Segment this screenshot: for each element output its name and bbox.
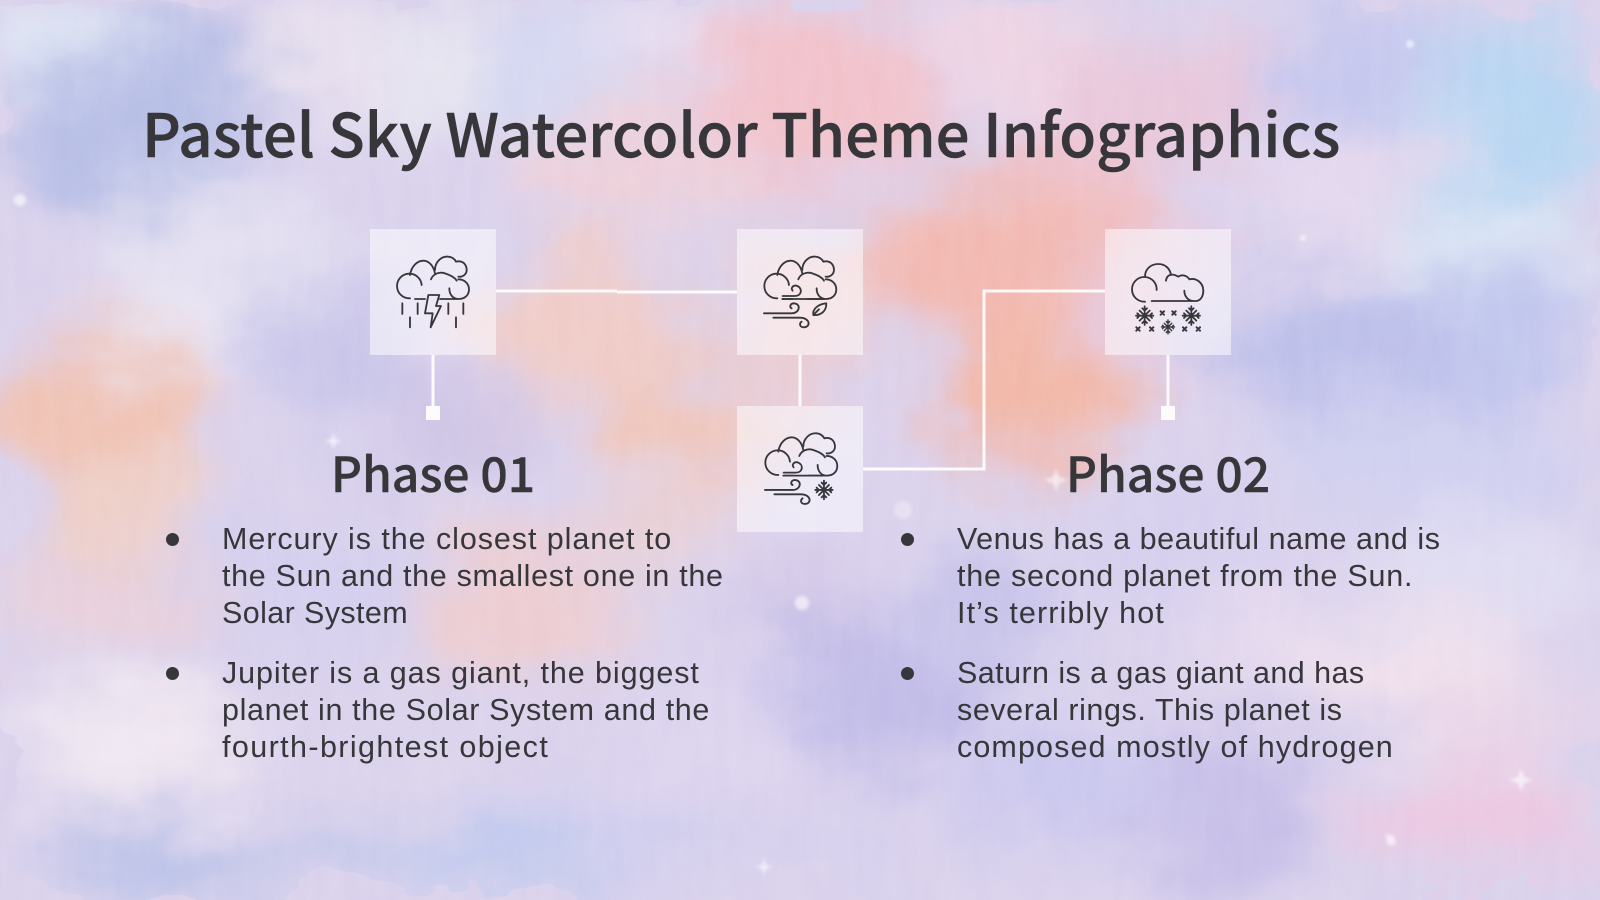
- heading: Phase 01: Phase 01: [331, 436, 535, 506]
- text: Saturn bullet: [901, 656, 1394, 764]
- text: Jupiter bullet: planet in the Solar System and the: [222, 693, 710, 727]
- text: Mercury bullet: [166, 522, 724, 630]
- icon: wind and leaf: [764, 257, 836, 327]
- icon box: snow cloud: [1105, 229, 1231, 355]
- text: Jupiter bullet: [166, 656, 710, 764]
- text: Venus bullet: [901, 522, 1440, 630]
- text: Venus bullet: Venus has a beautiful name and is: [957, 522, 1440, 556]
- text: Mercury bullet: the Sun and the smallest one in the: [222, 559, 724, 593]
- text: Venus bullet: the second planet from the Sun.: [957, 559, 1413, 593]
- title: Pastel Sky Watercolor Theme Infographics: [142, 88, 1340, 175]
- connector end square: Phase 01: [426, 406, 440, 420]
- icon box: thunderstorm: [370, 229, 496, 355]
- text: Venus bullet: It’s terribly hot: [957, 596, 1165, 630]
- text: Mercury bullet: Solar System: [222, 596, 408, 630]
- panel: Phase 01: [166, 436, 724, 764]
- icon box: windy leaf: [737, 229, 863, 355]
- heading: Phase 02: Phase 02: [1066, 436, 1270, 506]
- text: Saturn bullet: composed mostly of hydrogen: [957, 730, 1394, 764]
- icon: wind and snowflake: [765, 433, 837, 504]
- text: Saturn bullet: Saturn is a gas giant and has: [957, 656, 1365, 690]
- text: Mercury bullet: Mercury is the closest planet to: [222, 522, 672, 556]
- icon: thunderstorm cloud: [397, 257, 469, 327]
- connector end square: Phase 02: [1161, 406, 1175, 420]
- text: Jupiter bullet: fourth-brightest object: [222, 730, 549, 764]
- text: Jupiter bullet: Jupiter is a gas giant, the biggest: [222, 656, 700, 690]
- icon: snow cloud: [1132, 264, 1203, 334]
- panel: Phase 02: [901, 436, 1440, 764]
- icon box: windy snow: [737, 406, 863, 532]
- text: Saturn bullet: several rings. This planet is: [957, 693, 1343, 727]
